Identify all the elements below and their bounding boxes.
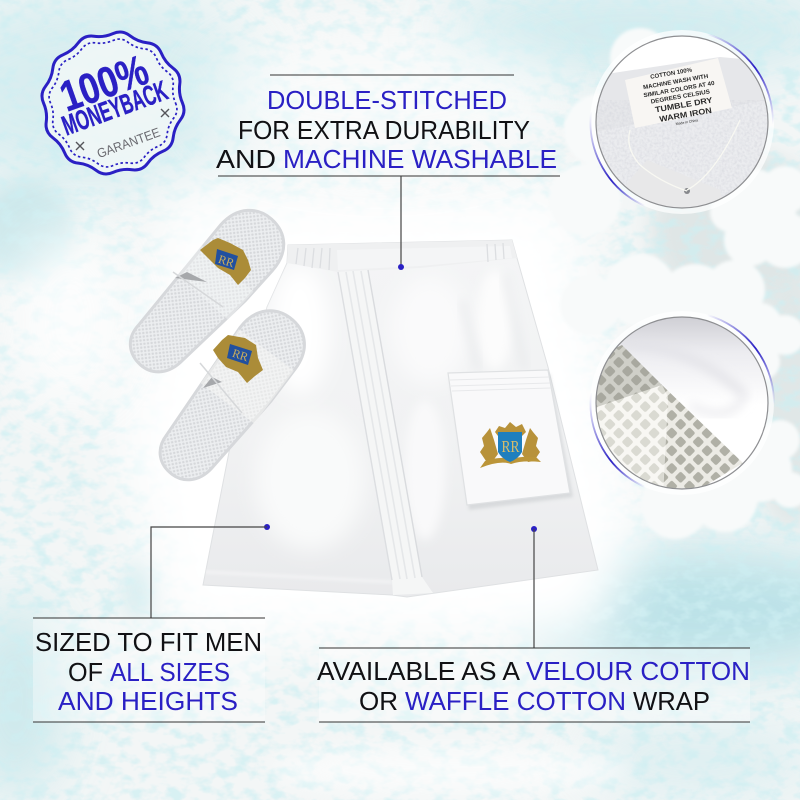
fluffy white clouds on the right [549,28,800,539]
leader dot [398,264,404,270]
photo: waffle slipper front [145,297,318,495]
care tag: TUMBLE DRY [654,95,714,114]
badge: 100% moneyback guarantee [33,23,193,183]
care tag: WARM IRON [659,106,713,124]
care tag: DEGREES CELSIUS [650,89,710,106]
leader dot [531,526,537,532]
slipper emblem [200,238,251,285]
waistband [287,240,517,272]
leader line [533,529,535,648]
icon: cross left [76,142,84,150]
white halo around the product [120,190,640,640]
pleats [338,270,433,595]
hang tag [628,120,740,206]
blue arc upper right [707,315,774,405]
care tag: MACHINE WASH WITH [643,74,709,91]
text line 1 start: AVAILABLE AS A [317,656,521,686]
text line 2 start: OR [359,686,398,716]
text line 3 highlight: MACHINE WASHABLE [283,144,557,174]
text line 2 highlight: WAFFLE COTTON [405,686,626,716]
photo: waffle slipper back [114,196,298,388]
leader line [151,527,267,618]
leader dot [264,524,270,530]
waffle fabric [596,345,743,488]
inset circle: care label [590,30,780,225]
text line 3: AND HEIGHTS [58,686,238,716]
pocket [448,370,573,510]
care tag [625,58,732,131]
badge text: garantee: GARANTEE [95,124,162,161]
care tag: SIMILAR COLORS AT 40 [643,81,716,99]
blue arc upper right [707,34,773,124]
blue arc lower left [590,112,645,206]
slipper emblem: RR [231,346,250,364]
slipper emblem: RR [217,252,236,270]
badge text: 100%: 100% [54,46,155,121]
heading text: DOUBLE-STITCHED [267,85,507,115]
badge text: moneyback: MONEYBACK [58,75,172,141]
text line 2 start: OF [68,657,103,687]
grey shadow behind clouds [650,150,800,310]
care tag: Made in China [675,118,698,126]
callout: double-stitched, machine washable [216,75,560,270]
callout: sizing [33,524,270,722]
slipper emblem [213,335,263,383]
text line 1: SIZED TO FIT MEN [35,627,262,657]
text line 2 highlight: ALL SIZES [110,657,230,687]
photo: velour cotton wrap skirt [203,240,598,597]
leader line [400,176,402,267]
care tag: COTTON 100% [650,67,693,81]
callout: velour or waffle cotton [317,526,750,722]
text line 3 start: AND [216,144,276,174]
inset circle: velour and waffle fabric [590,316,774,490]
pocket emblem: RR [502,437,520,456]
icon: cross right [161,109,169,117]
text line 2 end: WRAP [633,686,710,716]
text line 2: FOR EXTRA DURABILITY [238,115,530,145]
blue arc lower left [590,393,645,487]
text line 1 highlight: VELOUR COTTON [526,656,750,686]
